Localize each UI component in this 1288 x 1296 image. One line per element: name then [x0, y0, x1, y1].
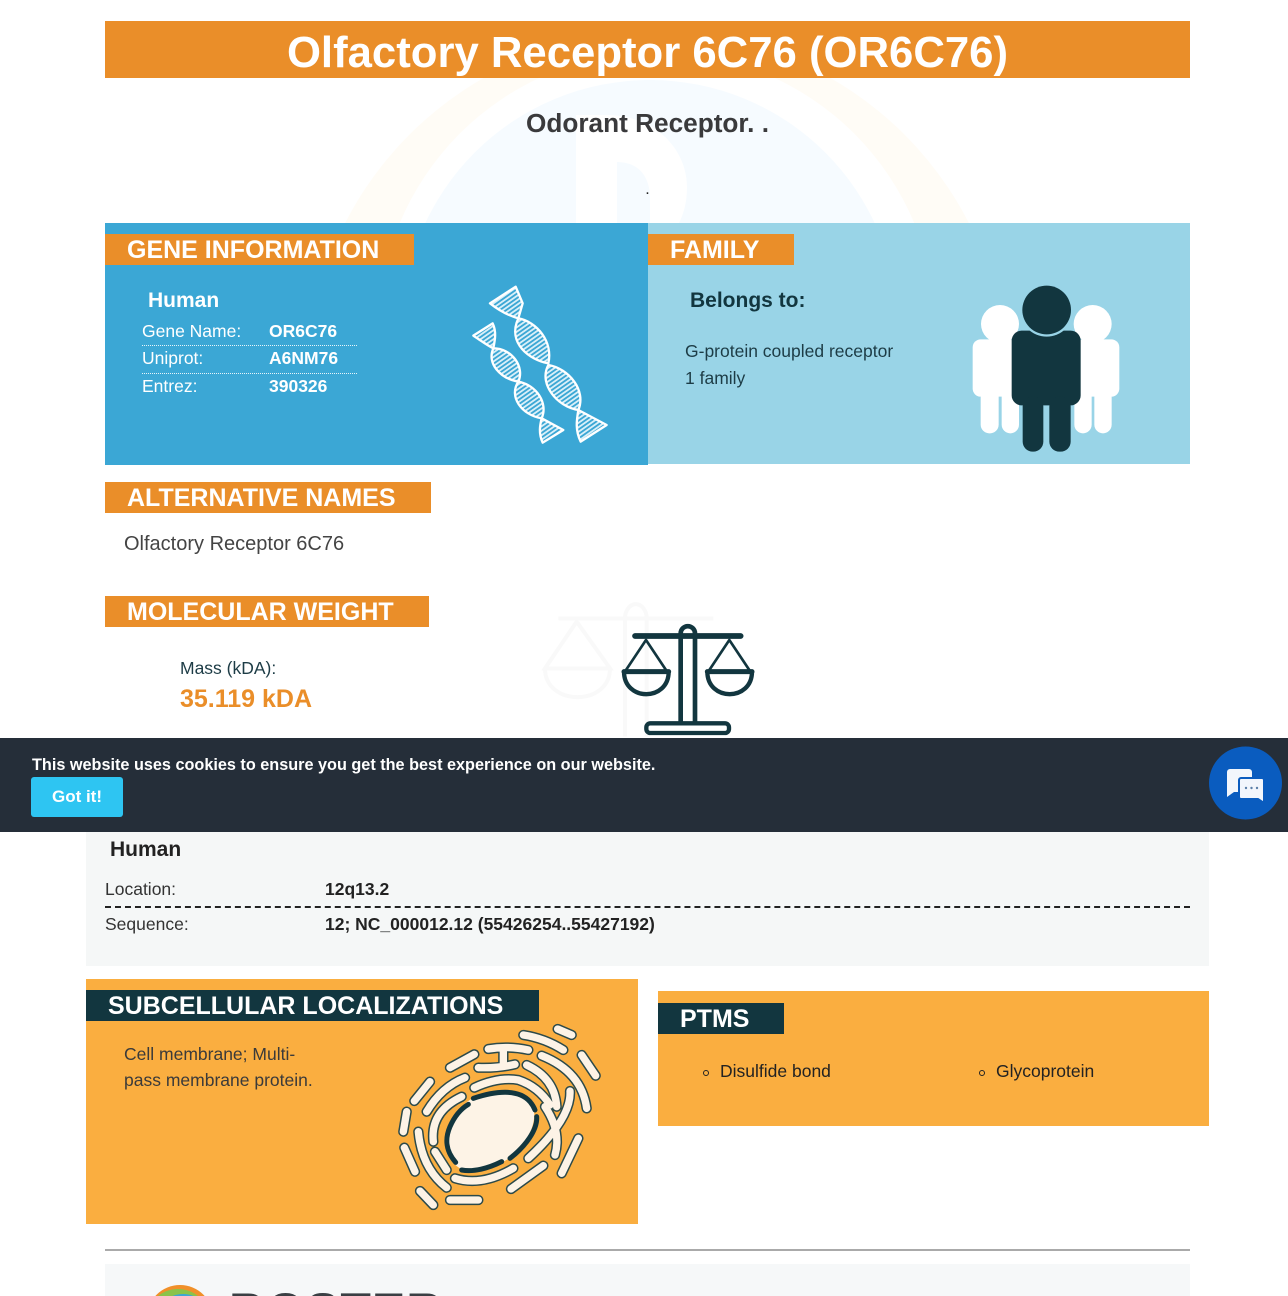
gene table: Entrez:	[142, 376, 197, 396]
button: got it: Got it!	[52, 787, 102, 806]
location row: 12q13.2	[325, 879, 389, 899]
title	[105, 21, 1190, 78]
belongs to: Belongs to:	[690, 289, 806, 312]
panel: ptms	[658, 991, 1209, 1126]
icon: scales	[622, 624, 754, 736]
panel: subcellular localizations	[86, 979, 638, 1224]
family text	[685, 341, 893, 388]
dot text: .	[645, 181, 650, 198]
gene table: OR6C76	[269, 321, 337, 341]
gene table: Gene Name:	[142, 321, 241, 341]
gene table: A6NM76	[269, 348, 338, 368]
mass value: 35.119 kDA	[180, 685, 312, 713]
sequence row: 12; NC_000012.12 (55426254..55427192)	[325, 914, 655, 934]
icon: family people	[972, 286, 1120, 452]
panel: family	[648, 223, 1190, 464]
mass label: Mass (kDA):	[180, 658, 276, 678]
logo mark	[156, 1285, 204, 1296]
gene table: Uniprot:	[142, 348, 203, 368]
icon: organelle	[398, 1024, 601, 1210]
sequence row	[105, 914, 655, 934]
icon: dna	[472, 286, 608, 444]
cookie banner	[0, 738, 1288, 832]
alternative names text: Olfactory Receptor 6C76	[124, 533, 344, 555]
ptm: glycoprotein: Glycoprotein	[996, 1061, 1094, 1081]
gene table: 390326	[269, 376, 327, 396]
family text: G-protein coupled receptor	[685, 341, 893, 361]
sequence row: Sequence:	[105, 914, 189, 934]
localization text	[124, 1044, 313, 1090]
heading: alternative names: ALTERNATIVE NAMES	[127, 484, 396, 512]
panel: human location	[86, 832, 1209, 966]
gene table	[142, 321, 357, 396]
heading: molecular weight: MOLECULAR WEIGHT	[127, 598, 394, 626]
icon: chat bubble	[1209, 746, 1282, 820]
species: Human	[110, 838, 181, 861]
location row	[105, 879, 389, 899]
panel: footer	[105, 1264, 1190, 1296]
heading: ptms	[658, 1003, 784, 1034]
button: got it	[31, 777, 123, 817]
species: Human	[148, 289, 219, 312]
ptm: disulfide bond: Disulfide bond	[720, 1061, 831, 1081]
heading: gene information: GENE INFORMATION	[127, 236, 379, 264]
watermark logo	[346, 78, 968, 223]
localization text: Cell membrane; Multi-	[124, 1044, 295, 1064]
family text: 1 family	[685, 368, 745, 388]
title: Olfactory Receptor 6C76 (OR6C76)	[287, 28, 1008, 77]
heading: subcellular localizations: SUBCELLULAR LOCALIZATIONS	[108, 992, 503, 1020]
heading: family	[648, 234, 794, 265]
heading: ptms: PTMS	[680, 1005, 749, 1033]
subtitle: Odorant Receptor. .	[526, 108, 769, 138]
localization text: pass membrane protein.	[124, 1070, 313, 1090]
heading: family: FAMILY	[670, 236, 759, 264]
location row: Location:	[105, 879, 176, 899]
panel: gene information	[105, 223, 648, 465]
cookie message: This website uses cookies to ensure you get the best experience on our website.	[32, 756, 655, 774]
